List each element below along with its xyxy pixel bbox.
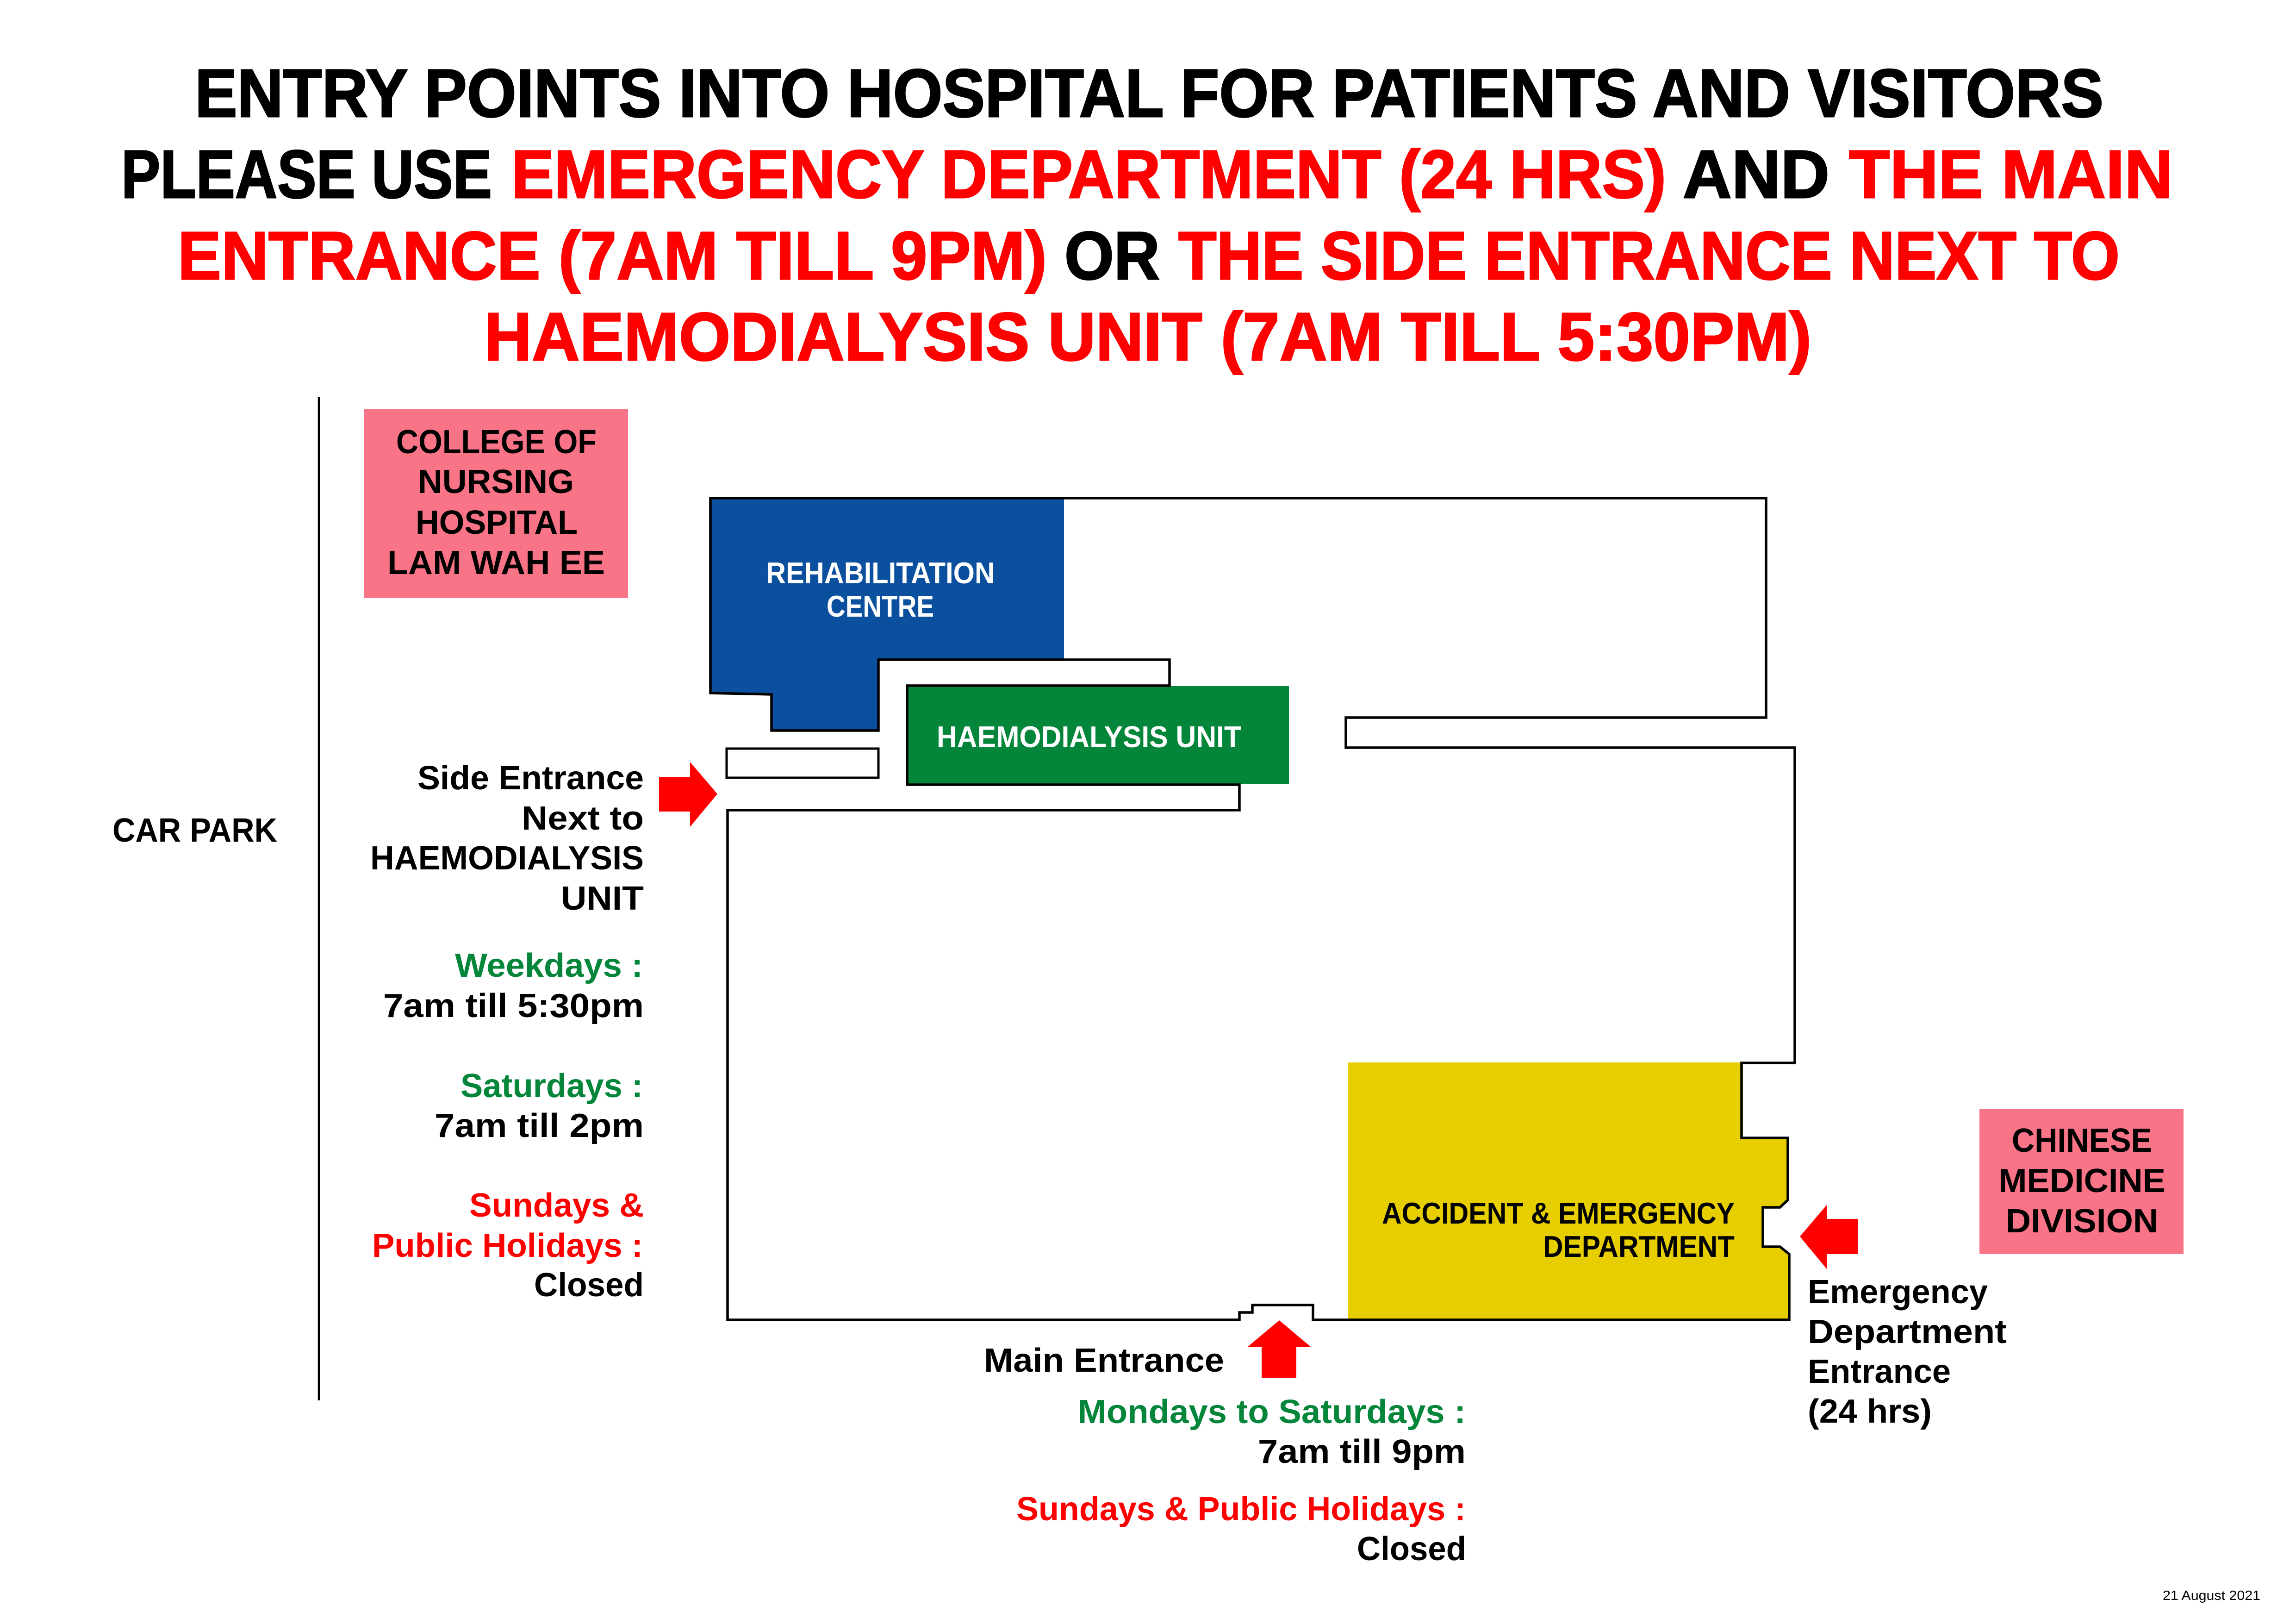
date: 21 August 2021: [2163, 1588, 2260, 1603]
main entrance label: Main Entrance: [984, 1342, 1224, 1379]
panel: chinese medicine division: MEDICINE: [1998, 1162, 2165, 1199]
panel: rehabilitation centre: REHABILITATION: [766, 556, 995, 590]
side entrance hours: Public Holidays :: [372, 1227, 643, 1264]
emergency entrance label: Entrance: [1808, 1353, 1951, 1390]
main entrance hours: [1016, 1393, 1466, 1568]
panel: rehabilitation centre: CENTRE: [827, 589, 934, 623]
title: THE SIDE ENTRANCE NEXT TO: [1178, 218, 2120, 294]
arrow: side entrance: [659, 762, 717, 827]
car park divider line: [318, 397, 320, 1400]
panel: chinese medicine division: DIVISION: [2006, 1203, 2158, 1240]
side entrance label: Side Entrance: [417, 760, 644, 797]
side entrance hours: Weekdays :: [455, 947, 643, 984]
main entrance hours: Closed: [1357, 1530, 1466, 1568]
panel: accident and emergency department: ACCIDENT & EMERGENCY: [1382, 1196, 1735, 1230]
panel: college of nursing: NURSING: [418, 463, 574, 500]
side entrance hours: Closed: [534, 1267, 644, 1304]
arrow: main entrance: [1247, 1320, 1311, 1378]
side entrance label: UNIT: [561, 880, 644, 917]
building outline: [710, 498, 1795, 1320]
arrow: emergency entrance: [1800, 1205, 1858, 1269]
title: THE MAIN: [1849, 137, 2173, 212]
title: [121, 56, 2173, 375]
title: OR: [1064, 218, 1160, 294]
panel: chinese medicine division: [1979, 1109, 2184, 1254]
car park label: CAR PARK: [112, 812, 277, 849]
main entrance hours: 7am till 9pm: [1258, 1433, 1466, 1470]
side entrance hours: 7am till 5:30pm: [383, 987, 644, 1024]
side entrance hours: [372, 947, 644, 1304]
panel: haemodialysis unit: HAEMODIALYSIS UNIT: [937, 720, 1241, 754]
panel: college of nursing: LAM WAH EE: [387, 544, 605, 581]
side entrance hours: 7am till 2pm: [435, 1107, 644, 1144]
title: AND: [1683, 137, 1829, 212]
panel: haemodialysis unit: [907, 686, 1289, 784]
side entrance hours: Saturdays :: [460, 1068, 643, 1105]
side entrance label: Next to: [522, 800, 644, 837]
title: HAEMODIALYSIS UNIT (7AM TILL 5:30PM): [484, 299, 1811, 375]
main entrance hours: Mondays to Saturdays :: [1078, 1393, 1466, 1430]
covered walkway block: [727, 749, 878, 778]
emergency entrance label: Emergency: [1808, 1274, 1988, 1311]
panel: accident and emergency department: DEPARTMENT: [1543, 1230, 1735, 1263]
emergency entrance label: Department: [1808, 1313, 2007, 1350]
title: EMERGENCY DEPARTMENT (24 HRS): [511, 137, 1666, 212]
panel: college of nursing: [364, 409, 628, 598]
panel: college of nursing: HOSPITAL: [416, 504, 578, 541]
panel: chinese medicine division: CHINESE: [2012, 1122, 2152, 1159]
panel: college of nursing: COLLEGE OF: [396, 424, 597, 461]
title: ENTRY POINTS INTO HOSPITAL FOR PATIENTS AND VISITORS: [195, 56, 2103, 131]
side entrance label: HAEMODIALYSIS: [370, 840, 644, 877]
panel: accident and emergency department: [1348, 1062, 1789, 1320]
side entrance hours: Sundays &: [469, 1187, 644, 1224]
title: ENTRANCE (7AM TILL 9PM): [178, 218, 1047, 294]
panel: rehabilitation centre: [710, 498, 1064, 731]
title: PLEASE USE: [121, 137, 492, 212]
emergency entrance label: [1808, 1274, 2007, 1430]
side entrance label: [370, 760, 644, 917]
main entrance hours: Sundays & Public Holidays :: [1016, 1491, 1466, 1528]
emergency entrance label: (24 hrs): [1808, 1393, 1932, 1430]
